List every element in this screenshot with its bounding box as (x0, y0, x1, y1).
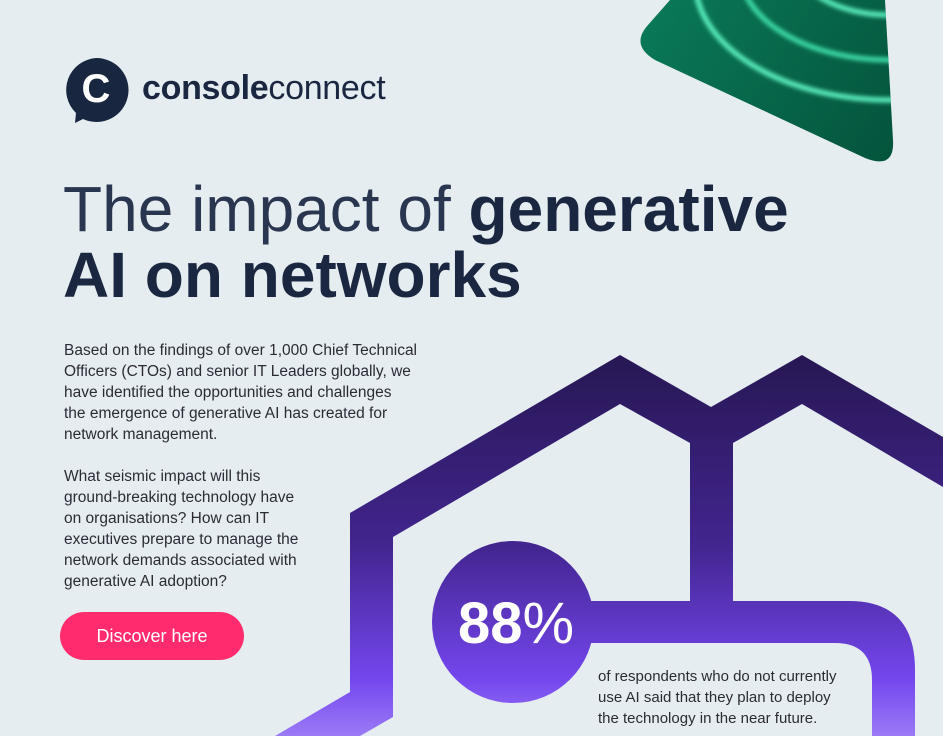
intro text: Officers (CTOs) and senior IT Leaders globally, we (64, 363, 411, 380)
decorative graphics (275, 0, 943, 736)
title: AI on networks (63, 239, 522, 311)
button: discover (60, 612, 244, 660)
stat caption: of respondents who do not currently (598, 668, 836, 685)
intro text: network management. (64, 426, 217, 443)
logo (66, 58, 386, 123)
intro text (64, 342, 417, 590)
title: The impact of generative (63, 173, 789, 245)
intro text: executives prepare to manage the (64, 531, 298, 548)
intro text: Based on the findings of over 1,000 Chief Technical (64, 342, 417, 359)
icon: logo mark: C (82, 67, 110, 111)
logo text: consoleconnect (142, 69, 385, 107)
intro text: network demands associated with (64, 552, 297, 569)
intro text: on organisations? How can IT (64, 510, 269, 527)
title (63, 173, 789, 311)
intro text: generative AI adoption? (64, 573, 227, 590)
intro text: ground-breaking technology have (64, 489, 294, 506)
intro text: What seismic impact will this (64, 468, 260, 485)
stat caption: the technology in the near future. (598, 710, 817, 727)
icon: logo mark (66, 58, 128, 123)
intro text: have identified the opportunities and challenges (64, 384, 391, 401)
graphic: purple house pipe (275, 355, 943, 736)
button: discover: Discover here (96, 626, 208, 646)
intro text: the emergence of generative AI has created for (64, 405, 387, 422)
stat: 88%: 88% (458, 591, 574, 656)
stat caption (598, 668, 836, 727)
stat caption: use AI said that they plan to deploy (598, 689, 831, 706)
graphic: green triangle (640, 0, 894, 162)
